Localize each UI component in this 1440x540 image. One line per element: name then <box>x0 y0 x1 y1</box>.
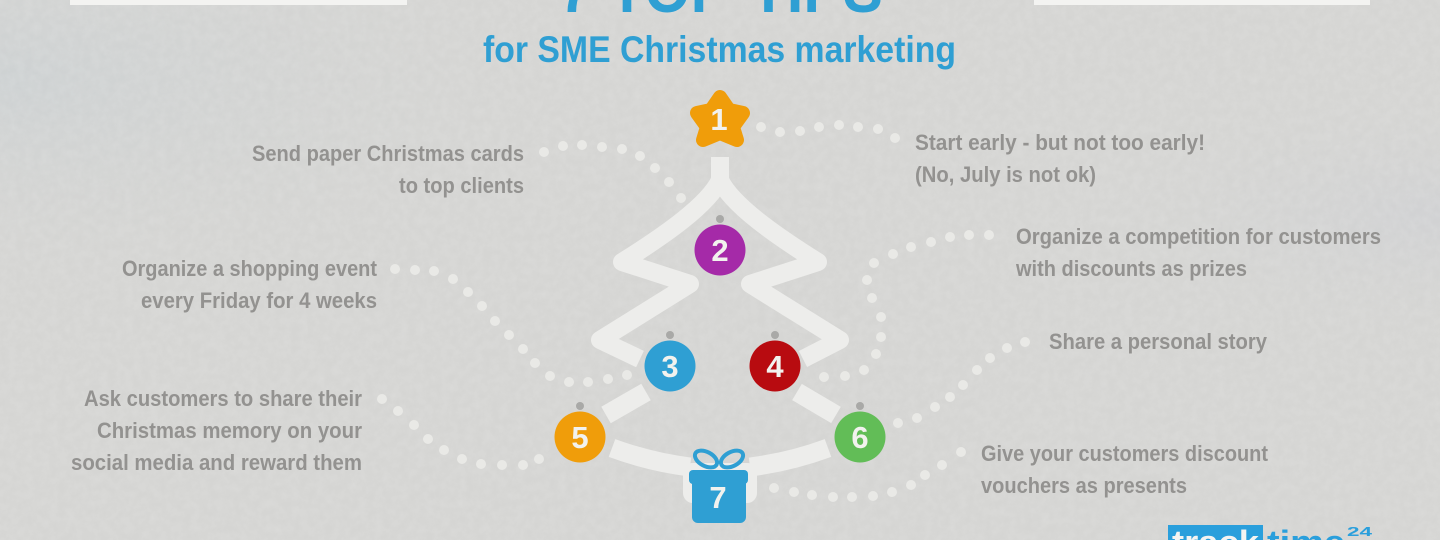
tip: customer memory: social media and reward them <box>71 450 362 475</box>
logo: tracktime24: 24 <box>1347 524 1373 539</box>
tip: customer memory <box>71 386 362 475</box>
tip: personal story: Share a personal story <box>1049 329 1268 354</box>
top left white panel <box>70 0 407 5</box>
tip: shopping event: Organize a shopping event <box>122 256 378 281</box>
dotted connector: shopping event tip <box>390 264 632 387</box>
tip: competition: with discounts as prizes <box>1015 256 1247 281</box>
christmas tree outline <box>600 157 840 496</box>
star 1 <box>697 97 743 140</box>
tip: discount vouchers: vouchers as presents <box>981 473 1187 498</box>
dotted connector: competition tip <box>819 230 994 382</box>
ornament 3: 3 <box>661 349 679 384</box>
tip: shopping event <box>122 256 378 313</box>
dotted connector: tip 1 <box>756 120 900 143</box>
tip: start early: Start early - but not too early! <box>915 130 1205 155</box>
tip: send cards <box>252 141 524 198</box>
ornament 4 <box>750 331 800 392</box>
ornament 4: 4 <box>766 349 784 384</box>
tip: send cards: Send paper Christmas cards <box>252 141 524 166</box>
dotted connector: send cards tip <box>539 140 686 203</box>
tip: customer memory: Ask customers to share their <box>84 386 362 411</box>
dotted connector: personal story tip <box>893 337 1030 428</box>
gift box 7: 7 <box>709 480 727 515</box>
tip: discount vouchers <box>981 441 1269 498</box>
star 1: 1 <box>710 102 728 137</box>
tip: shopping event: every Friday for 4 weeks <box>141 288 377 313</box>
tip: competition: Organize a competition for customers <box>1016 224 1381 249</box>
ornament 6 <box>834 402 886 462</box>
tip: customer memory: Christmas memory on your <box>97 418 362 443</box>
tip: start early: (No, July is not ok) <box>915 162 1096 187</box>
ornament 5: 5 <box>571 420 589 455</box>
tip: send cards: to top clients <box>399 173 524 198</box>
ornament 3 <box>644 331 696 392</box>
tip: competition <box>1015 224 1381 281</box>
logo: tracktime24 <box>1168 524 1373 540</box>
dotted connector: discount vouchers tip <box>769 447 966 502</box>
ornament 2: 2 <box>711 233 729 268</box>
top right white panel <box>1034 0 1370 5</box>
tip: discount vouchers: Give your customers discount <box>981 441 1269 466</box>
subtitle: for SME Christmas marketing <box>483 29 956 70</box>
dotted connector: customer memory tip <box>377 394 544 470</box>
tip: start early <box>915 130 1205 187</box>
ornament 6: 6 <box>851 420 869 455</box>
ornament 2 <box>694 215 746 276</box>
ornament 5 <box>554 402 606 462</box>
gift box 7 <box>689 447 748 523</box>
